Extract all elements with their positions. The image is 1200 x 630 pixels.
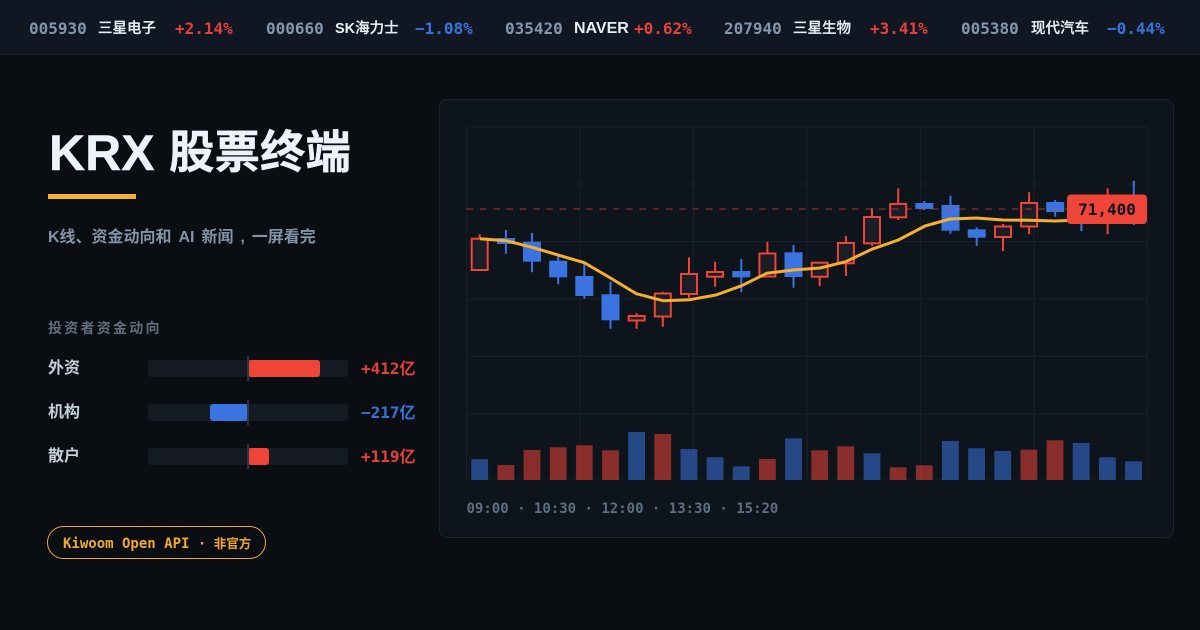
ticker: SK海力士 — [266, 19, 473, 38]
title: KRX — [49, 125, 155, 181]
ticker: SK海力士: 000660 — [266, 19, 324, 38]
row: 外资 — [48, 356, 416, 381]
row: 散户 — [48, 444, 416, 469]
title — [49, 125, 351, 181]
bar: -217 — [210, 404, 248, 421]
candles: wicks — [480, 181, 1134, 329]
row: 散户: 散户 — [48, 448, 80, 465]
ticker: NAVER: 035420 — [505, 19, 563, 38]
title accent rule — [48, 194, 136, 199]
badge: Kiwoom Open API · 非官方 — [63, 536, 251, 552]
badge — [47, 526, 266, 559]
ticker: NAVER — [505, 19, 692, 38]
row: 散户: +119亿 — [361, 447, 416, 466]
last price label — [1067, 194, 1147, 224]
ticker: 现代汽车: 现代汽车 — [1031, 21, 1089, 37]
panel: investor flows — [48, 320, 416, 469]
ticker: NAVER: NAVER — [574, 20, 629, 37]
candles: down bodies — [497, 200, 1143, 320]
row: 外资: +412亿 — [361, 359, 416, 378]
ticker: 现代汽车 — [961, 19, 1165, 38]
ticker: 三星电子 — [29, 19, 233, 38]
volume bars — [471, 432, 1142, 480]
title: 股票终端 — [169, 127, 351, 178]
ticker: SK海力士: SK海力士 — [335, 21, 399, 37]
ticker bar — [0, 0, 1200, 55]
bar: +119 — [248, 448, 269, 465]
panel: chart card — [439, 99, 1174, 538]
subtitle: K线、资金动向和 AI 新闻 , 一屏看完 — [48, 229, 316, 246]
ticker: 三星电子: 三星电子 — [98, 21, 156, 37]
last price dashed line — [466, 208, 1147, 210]
time axis labels: 09:00 · 10:30 · 12:00 · 13:30 · 15:20 — [466, 501, 778, 517]
ticker: 现代汽车: −0.44% — [1107, 19, 1165, 38]
last price label: 71,400 — [1078, 200, 1136, 219]
bar: +412 — [248, 360, 320, 377]
ticker: 三星电子: 005930 — [29, 19, 87, 38]
row: 机构: −217亿 — [361, 403, 416, 422]
ticker: 三星生物: +3.41% — [870, 19, 928, 38]
flows heading: 投资者资金动向 — [48, 320, 162, 336]
ticker: 三星生物: 207940 — [724, 19, 782, 38]
ticker: SK海力士: −1.08% — [415, 19, 473, 38]
ticker: NAVER: +0.62% — [634, 19, 692, 38]
ticker: 现代汽车: 005380 — [961, 19, 1019, 38]
moving average line — [480, 218, 1133, 301]
row: 机构: 机构 — [48, 404, 80, 421]
row: 机构 — [48, 400, 416, 425]
candles: up bodies — [472, 203, 1116, 320]
row: 外资: 外资 — [48, 360, 80, 377]
ticker: 三星电子: +2.14% — [175, 19, 233, 38]
ticker: 三星生物: 三星生物 — [793, 21, 851, 37]
ticker: 三星生物 — [724, 19, 928, 38]
